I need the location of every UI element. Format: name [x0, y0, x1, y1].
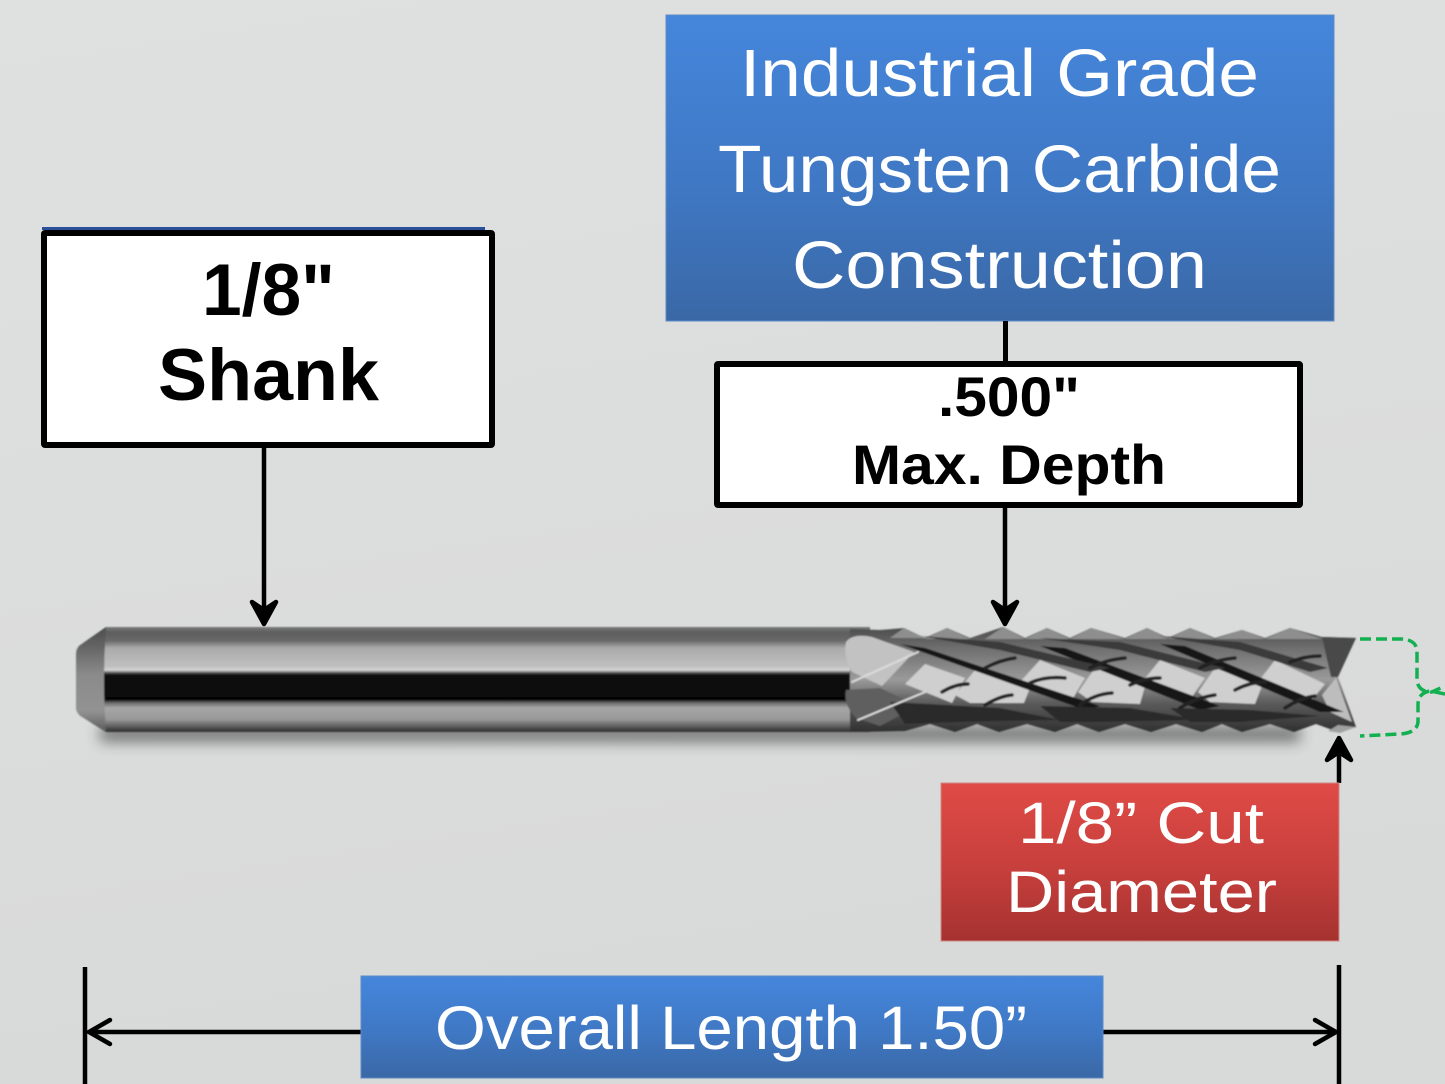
white label: max depth [717, 364, 1300, 505]
light facets [905, 660, 1325, 704]
material text line 1: Industrial Grade [740, 36, 1259, 111]
blue panel: material [666, 15, 1334, 321]
material text line 2: Tungsten Carbide [718, 132, 1281, 207]
cut diameter text line 2: Diameter [1006, 860, 1277, 925]
depth value: .500" [938, 365, 1080, 428]
connector: material panel to depth label [1003, 321, 1008, 363]
highlight strokes [852, 652, 925, 720]
label text: 1/8 inch: 1/8" [202, 250, 335, 331]
tooth highlights on upper edge [890, 627, 1322, 639]
arrow: cut diameter label to tip [1327, 738, 1351, 783]
green dashed brace for cut diameter [1360, 639, 1445, 736]
material text line 3: Construction [792, 228, 1207, 303]
small chip breaker strokes [942, 656, 1320, 708]
arrow: shank label to bit [252, 447, 276, 624]
blue panel: overall length [361, 976, 1103, 1078]
arrow: depth label to bit [993, 508, 1017, 624]
dark lower bands [890, 702, 1320, 724]
dark diagonal grooves [900, 644, 1344, 712]
depth caption: Max. Depth [852, 433, 1166, 496]
overall length text: Overall Length 1.50” [435, 994, 1027, 1062]
overall length dimension lines [85, 965, 1339, 1084]
label text: shank: Shank [158, 335, 379, 416]
red panel: cut diameter [941, 783, 1339, 941]
white label: shank [42, 227, 492, 445]
dark upper bands [920, 636, 1328, 672]
fluted cutting section [845, 627, 1356, 733]
cut diameter text line 1: 1/8” Cut [1018, 791, 1264, 856]
drill bit photo illustration [76, 627, 1356, 742]
smooth shank [76, 627, 870, 732]
